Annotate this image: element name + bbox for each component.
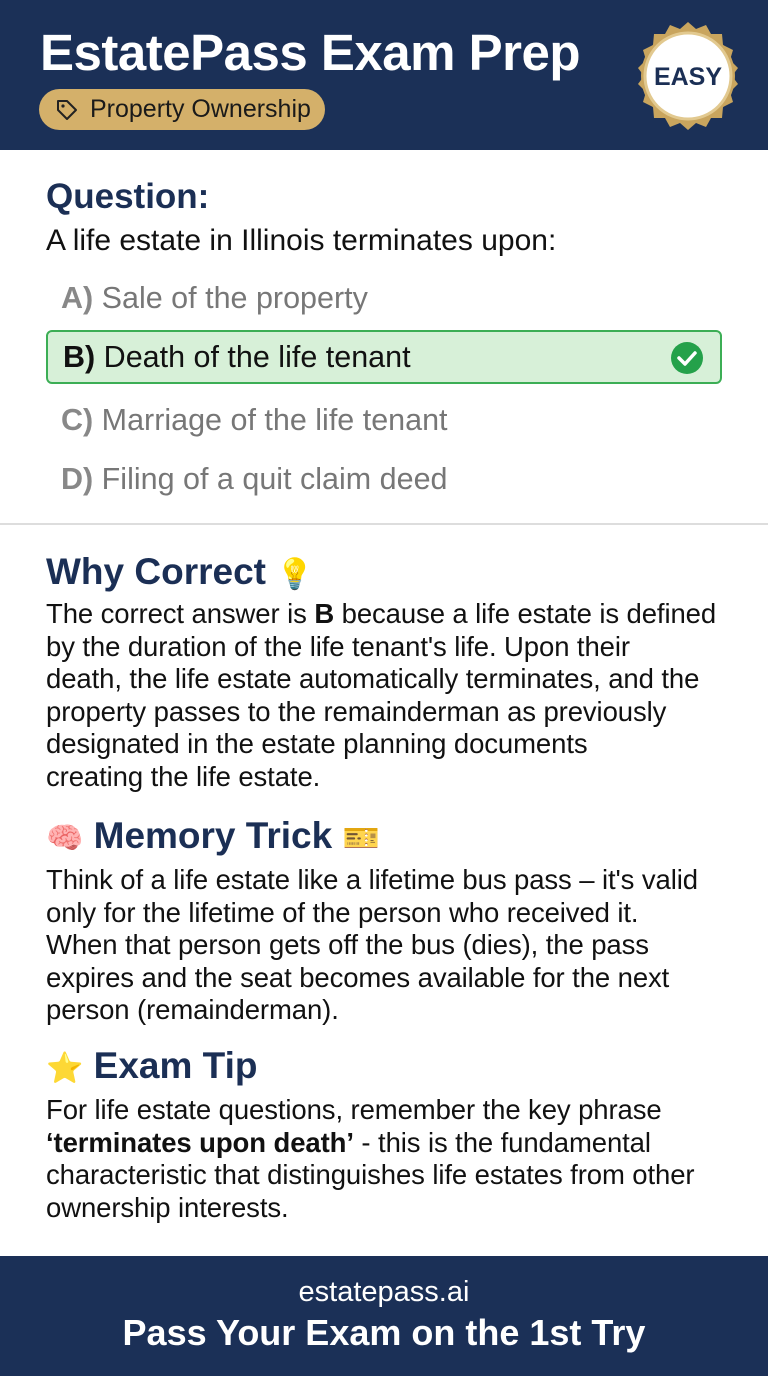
badge: EASY: EASY — [654, 63, 722, 91]
memory trick heading: 🧠 Memory Trick 🎫 — [46, 815, 380, 856]
why correct text: by the duration of the life tenant's life. Upon their — [46, 631, 630, 662]
title: EstatePass Exam Prep — [40, 24, 580, 81]
question heading: Question: — [46, 177, 209, 216]
why correct text: The correct answer is B because a life estate is defined — [46, 598, 716, 629]
category tag — [39, 89, 325, 130]
exam tip text: characteristic that distinguishes life estates from other — [46, 1159, 694, 1190]
why correct heading: Why Correct 💡 — [46, 551, 314, 592]
exam tip text — [46, 1094, 694, 1223]
icon: tag — [57, 100, 77, 120]
option D: D) Filing of a quit claim deed — [61, 462, 448, 496]
question text: A life estate in Illinois terminates upon: — [46, 224, 556, 257]
category tag: Property Ownership — [90, 95, 311, 123]
header — [0, 0, 768, 150]
why correct text: designated in the estate planning documents — [46, 728, 588, 759]
footer tagline: Pass Your Exam on the 1st Try — [123, 1312, 645, 1353]
option B correct: B) Death of the life tenant — [63, 340, 411, 374]
option B correct — [46, 330, 722, 384]
exam tip text: ‘terminates upon death’ - this is the fundamental — [46, 1127, 651, 1158]
exam tip heading: ⭐ Exam Tip — [46, 1045, 257, 1086]
memory trick text: When that person gets off the bus (dies), the pass — [46, 929, 649, 960]
memory trick text — [46, 864, 698, 1025]
option A: A) Sale of the property — [61, 281, 368, 315]
memory trick text: person (remainderman). — [46, 994, 339, 1025]
memory trick text: Think of a life estate like a lifetime bus pass – it's valid — [46, 864, 698, 895]
why correct text: property passes to the remainderman as previously — [46, 696, 666, 727]
badge: EASY — [638, 22, 738, 130]
why correct text: creating the life estate. — [46, 761, 320, 792]
memory trick text: expires and the seat becomes available for the next — [46, 962, 669, 993]
footer — [0, 1256, 768, 1376]
footer url: estatepass.ai — [299, 1276, 469, 1308]
icon: check — [671, 342, 703, 374]
why correct text: death, the life estate automatically terminates, and the — [46, 663, 699, 694]
option C: C) Marriage of the life tenant — [61, 403, 448, 437]
exam tip text: ownership interests. — [46, 1192, 289, 1223]
exam tip text: For life estate questions, remember the key phrase — [46, 1094, 662, 1125]
why correct text — [46, 598, 716, 792]
memory trick text: only for the lifetime of the person who received it. — [46, 897, 638, 928]
